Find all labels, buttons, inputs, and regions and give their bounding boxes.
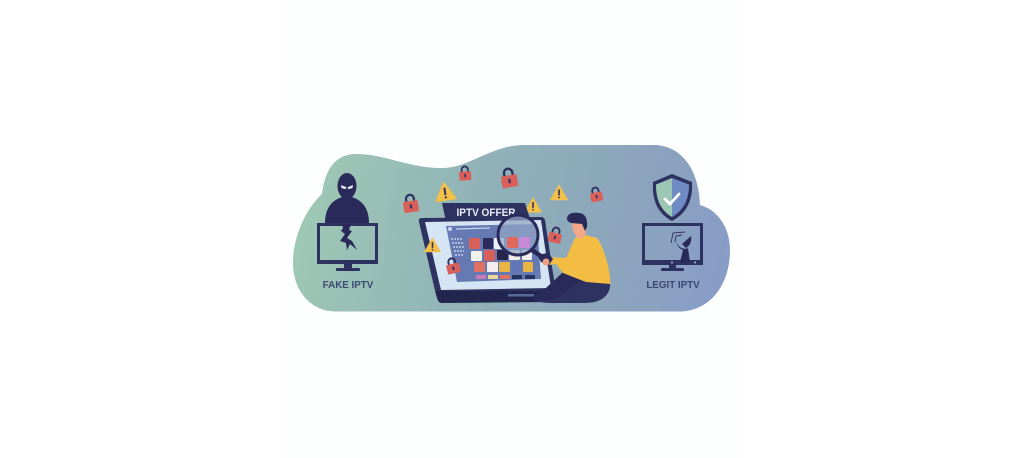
dish: [676, 236, 691, 262]
tablet with iptv offer: [419, 203, 556, 303]
offer banner: [442, 203, 531, 226]
icon: warning: [434, 181, 456, 201]
icon: shield: [653, 174, 692, 221]
icon: lock: [589, 186, 603, 203]
person seated: [532, 213, 610, 303]
icon: cracked monitor: [317, 224, 378, 271]
fake iptv group: [317, 173, 378, 291]
icon: lock: [500, 167, 519, 189]
magnifying glass: [498, 215, 548, 261]
label: legit iptv: LEGIT IPTV: [646, 280, 700, 291]
app panel: [446, 224, 541, 282]
app tiles: [469, 237, 535, 279]
icon: monitor with satellite dish: [642, 224, 703, 271]
tablet base: [436, 291, 555, 303]
icon: warning: [551, 185, 567, 200]
icon: lock on tablet: [445, 257, 461, 275]
icon: hacker: [325, 173, 369, 223]
cloud blob panel: [293, 145, 730, 312]
icon: lock: [402, 194, 419, 213]
icon: lock: [459, 166, 472, 181]
hair: [567, 213, 587, 231]
tablet screen: [425, 220, 551, 290]
sidebar list: [451, 239, 464, 255]
label: fake iptv: FAKE IPTV: [323, 280, 374, 291]
background panel off-white: [285, 0, 740, 458]
icon: warning on tablet: [425, 238, 440, 252]
offer heading: IPTV OFFER: [456, 207, 516, 219]
legit iptv group: [642, 174, 703, 291]
tablet body: [419, 217, 556, 299]
hand and phone: [537, 253, 553, 265]
icon: lock: [547, 226, 563, 244]
legs: [535, 275, 610, 303]
floating locks and warnings: [402, 166, 603, 244]
sweater: [547, 235, 610, 284]
head: [572, 222, 586, 238]
icon: warning: [525, 198, 541, 212]
